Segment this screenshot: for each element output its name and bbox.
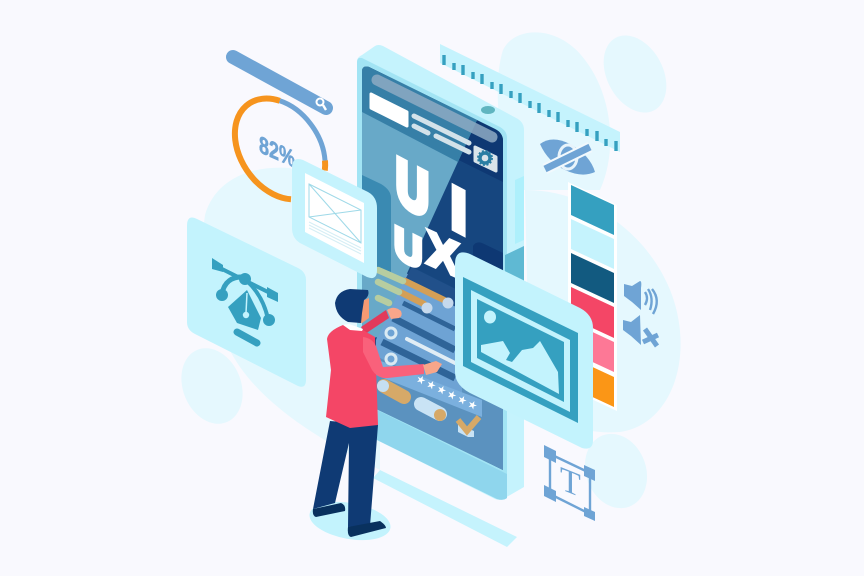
ruler <box>440 44 620 152</box>
header lines <box>414 116 469 152</box>
list rows <box>376 270 462 398</box>
background blobs <box>171 25 681 517</box>
UI UX lettering: U <box>394 217 423 280</box>
screen header <box>362 67 503 182</box>
search bar <box>233 57 326 110</box>
image card <box>455 252 593 449</box>
UI UX lettering: I <box>450 172 467 250</box>
avatar icons <box>386 328 396 364</box>
colour palette <box>568 182 617 411</box>
pen tool icon <box>212 258 278 343</box>
sliders <box>378 270 454 314</box>
trousers <box>313 421 378 527</box>
text line <box>407 339 455 363</box>
icon: crossed eye <box>540 140 595 175</box>
pen tool card <box>187 218 306 387</box>
collar <box>343 324 363 331</box>
settings button <box>475 147 496 171</box>
UI UX lettering: U <box>396 145 429 233</box>
jacket <box>326 325 378 428</box>
lit beam <box>362 67 477 340</box>
icon: text box: T <box>560 459 581 505</box>
near hand <box>423 361 442 375</box>
UI UX lettering: X <box>427 219 459 288</box>
phone body <box>357 45 524 500</box>
shoes <box>313 503 345 517</box>
far hand <box>387 308 402 319</box>
top pill <box>377 80 492 137</box>
person <box>306 289 442 546</box>
toggle white <box>421 404 446 421</box>
header white box <box>371 94 407 126</box>
ground shadow <box>306 496 394 546</box>
checkmark <box>458 417 479 437</box>
face <box>358 298 369 323</box>
screen <box>362 67 503 470</box>
progress ring 82% <box>235 99 325 199</box>
rating stars: ★★★★★★ <box>414 373 481 414</box>
near arm <box>363 337 424 378</box>
dark shade <box>473 242 503 280</box>
phone <box>357 45 524 500</box>
toggle tan <box>377 380 404 397</box>
speaker dot <box>481 106 495 114</box>
far arm <box>361 310 389 334</box>
icon: speaker on <box>624 281 657 314</box>
floor strip <box>373 470 517 547</box>
UI UX lettering <box>394 145 467 288</box>
icon: text box <box>544 445 595 521</box>
icon: speaker muted <box>623 315 658 346</box>
lower screen panel <box>376 340 503 470</box>
hair <box>335 289 368 323</box>
percent label: 82% <box>259 130 295 173</box>
wireframe card <box>292 159 377 278</box>
